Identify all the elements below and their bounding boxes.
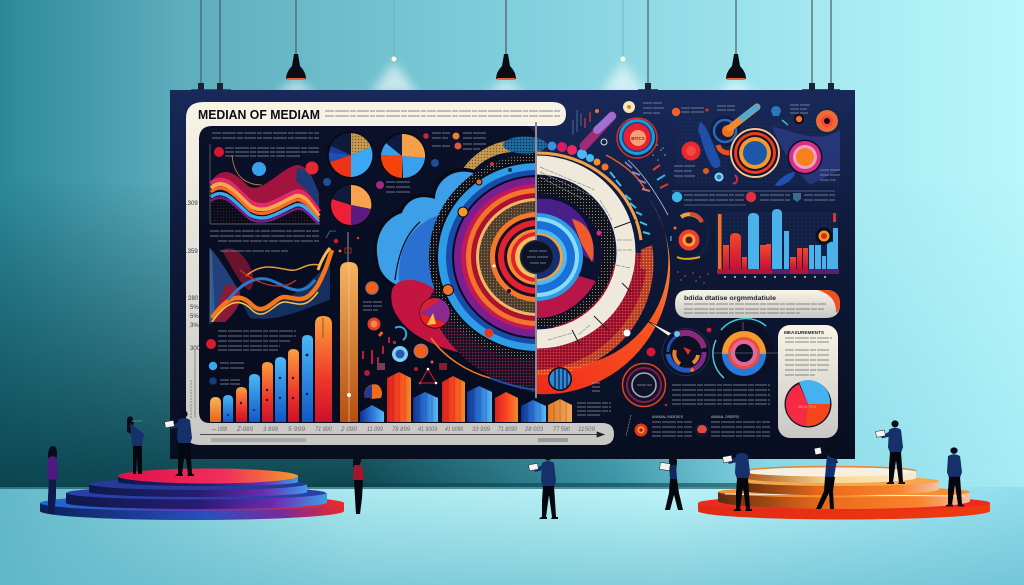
person: man far right [945,447,964,506]
person: man on top of right podium [876,420,905,484]
small target [794,114,804,124]
axis labels: 77 590 [553,426,570,433]
donut chart 2 [712,319,778,384]
person: woman far left [47,446,58,513]
pie 1 [326,132,374,178]
small notes beside pies [323,132,486,192]
left axis numbers: 5% [190,305,199,311]
axis labels: 3 899 [263,426,279,433]
icon: orange ring [634,424,648,436]
lamp shades [286,54,746,79]
person: bending on podium [127,416,144,474]
title: MEDIAN OF MEDIAM [198,108,320,122]
tan and blue dome cap [463,136,547,172]
dotted red band [428,289,535,392]
title description [325,111,560,116]
pink orange orb [788,140,822,174]
left axis numbers: 5% [190,314,199,320]
striped globe [548,367,572,391]
ceiling lamps and hanging cords [191,0,840,94]
left axis numbers [186,201,201,352]
small red dots [646,328,711,406]
board clamps [191,83,840,93]
measurement side panel: SELECTION [798,405,817,409]
left axis numbers: 280 [188,296,199,302]
person: woman with laptop [659,453,683,510]
person: man near right podium [723,445,752,511]
axis labels: 11 099 [367,426,383,433]
central left half rings [428,154,535,392]
left inner panel shade [199,126,536,423]
measurement side panel [778,325,838,438]
orange dot label [672,108,680,116]
cream band dividers and text [572,220,636,345]
large target [730,128,780,178]
axis labels: 33 999 [472,426,491,433]
house-shaped bars [360,372,572,422]
central right half rings [537,152,670,394]
person: woman on right podium [815,445,838,509]
wave chart 1 [210,144,320,225]
left axis numbers: 300 [190,346,201,352]
red badge [617,118,657,158]
cream frame: title bar, left rail and axis band [186,102,614,445]
axis labels: 28 003 [524,426,544,433]
icon: red dome [695,423,709,437]
ring gauge [622,364,666,406]
left axis numbers: .359 [186,249,198,255]
left axis numbers: 3% [190,323,199,329]
centre disc [520,240,554,274]
icon: red marker [214,147,224,157]
donut chart 1 [662,328,710,376]
bar glyph dots [227,354,308,416]
bead arc [548,142,608,170]
cream heading pill [675,290,840,318]
pie charts top row [326,132,426,226]
axis labels: Z-089 [236,426,254,433]
left axis numbers: .309 [186,201,198,207]
axis line with arrow [200,432,604,437]
axis labels: 71 8090 [498,426,517,433]
left bar chart [210,262,358,422]
axis labels: 11509 [578,426,596,433]
axis labels: 71 890 [315,426,332,433]
tall bar [340,262,358,422]
pie 2 [380,132,426,180]
left lower wave chart [210,248,332,324]
icon: half pie [364,384,382,399]
left podium [40,468,344,520]
mid axis ornament [326,231,359,262]
small accents [771,106,781,116]
blue cloud [374,168,500,320]
orange crescent [537,197,670,394]
axis labels: — 1088 [211,426,227,433]
callout pointer [646,320,677,340]
axis labels: 2 090 [340,426,358,433]
person: with tablet on podium [165,410,194,476]
ring with capsule [710,116,740,146]
person: woman in red [353,453,364,514]
red ball [682,142,700,160]
axis labels: 41 9099 [445,426,463,433]
bubbles [252,162,266,176]
swirl target icon [670,214,708,259]
red badge: BITCS [631,136,645,141]
lower info columns [626,415,770,437]
top purple capsule and mini bars [573,109,666,161]
cream heading pill: bdida dtatise orgmmdatiule [684,295,777,302]
right podium [698,466,990,520]
central divider line [535,122,537,398]
ring markers left [442,162,512,338]
right top graphics cluster [672,105,840,186]
person: man with tablet centre [529,453,558,519]
main board [170,90,855,459]
axis labels: 5 999 [288,426,306,433]
top-right dashed spokes [606,155,668,234]
text notes beside bars [206,331,296,385]
pie 3 [330,184,372,226]
measurement side panel: MEASUREMENTS [784,330,824,335]
panel pie chart [784,380,832,428]
crimson blob [391,280,470,355]
rail scale [191,350,195,418]
eye target [814,108,840,134]
icon: triangle nodes [420,369,436,383]
axis labels: 41 9009 [418,426,437,433]
mid small icons [362,282,447,399]
people silhouettes [47,410,964,519]
axis labels [211,426,596,433]
paragraph text block [577,383,770,415]
cream dot badge and note [623,101,664,113]
divider info row [672,191,835,205]
right bar chart [677,209,839,284]
intro text above wave chart [210,133,319,241]
dotted scatter [677,271,709,284]
red pie ball [420,298,450,328]
axis labels: 78 899 [392,426,411,433]
lower info columns: ANNUAL ORDERS [711,415,739,419]
lower info columns: ANNUAL INDEXES [652,415,683,419]
